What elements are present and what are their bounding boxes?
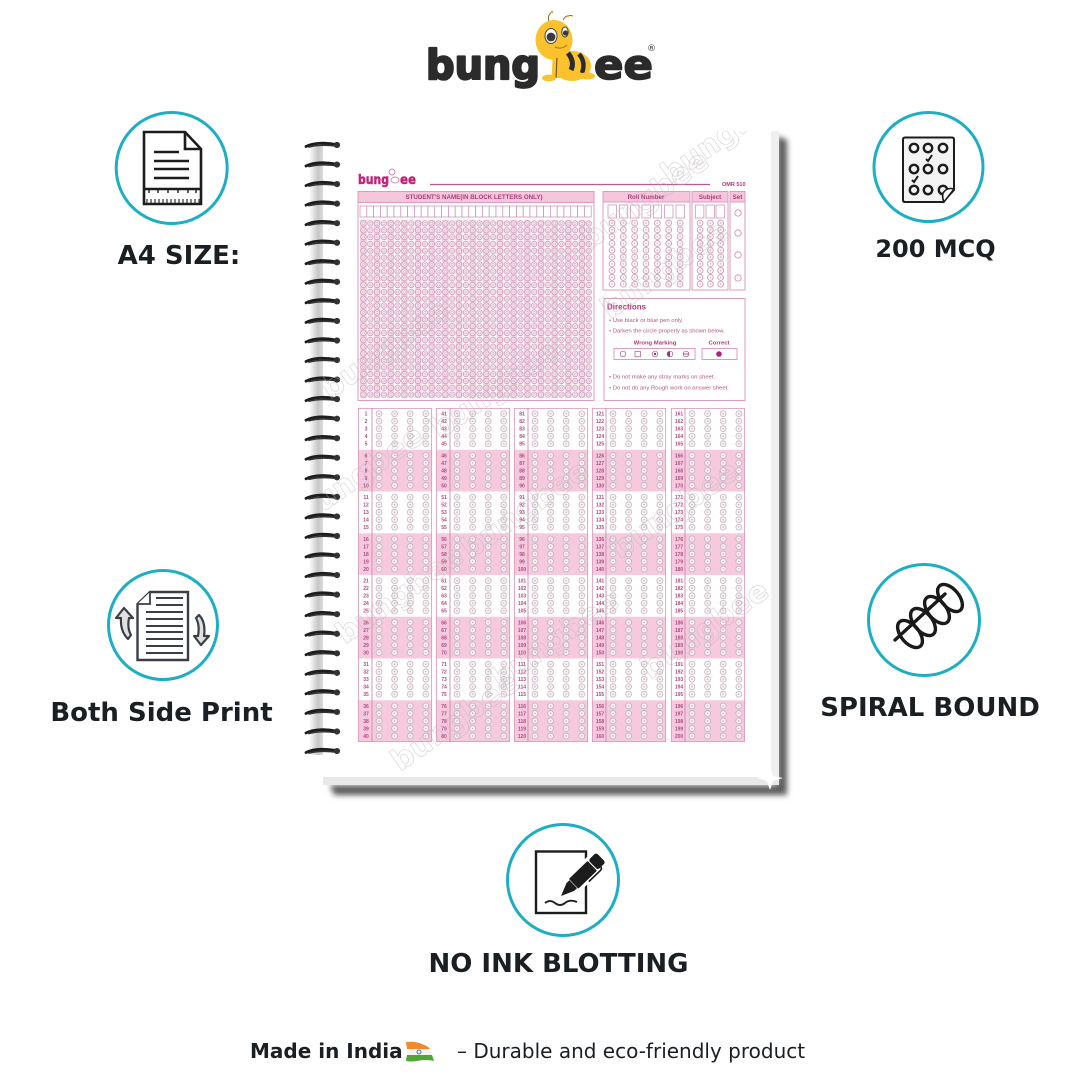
notebook drop shadow xyxy=(330,136,787,795)
answer column 5: 175 xyxy=(675,525,683,531)
answer column 4: 146 xyxy=(596,620,604,626)
answer column 2: 80 xyxy=(441,734,447,740)
binding edge shade xyxy=(309,145,323,755)
answer column 5: 170 xyxy=(675,483,683,489)
answer column 4: 126 xyxy=(596,453,604,459)
logo registered mark: ® xyxy=(647,44,656,54)
panel: directions xyxy=(604,298,745,400)
answer column 5: 184 xyxy=(675,601,683,607)
answer column 3: 120 xyxy=(518,734,526,740)
wrong marking samples xyxy=(614,348,695,360)
answer column 3: 101 xyxy=(518,578,526,584)
answer column 4: 138 xyxy=(596,552,604,558)
answer column 3: 106 xyxy=(518,620,526,626)
brand logo xyxy=(426,11,656,89)
answer column 3: 92 xyxy=(519,502,525,508)
answer column 1: 25 xyxy=(363,608,369,614)
answer column 2: 58 xyxy=(441,552,447,558)
correct sample xyxy=(702,348,737,360)
answer column 4: 133 xyxy=(596,510,604,516)
answer column 5: 165 xyxy=(675,442,683,448)
label: 200 MCQ: 200 MCQ xyxy=(875,235,996,263)
watermarks xyxy=(290,78,796,779)
logo wordmark left: bung xyxy=(426,41,540,89)
answer column 4: 131 xyxy=(596,495,604,501)
answer column 1 xyxy=(358,408,433,742)
answer column 1: 15 xyxy=(363,525,369,531)
durable note: – Durable and eco-friendly product xyxy=(457,1039,805,1063)
answer column 4: 139 xyxy=(596,559,604,565)
answer column 4: 143 xyxy=(596,594,604,600)
answer column 2: 76 xyxy=(441,704,447,710)
answer column 3: 95 xyxy=(519,525,525,531)
watermarks: bungbee xyxy=(385,665,526,779)
logo wordmark right: ee xyxy=(594,41,653,89)
answer column 3: 119 xyxy=(518,726,526,732)
watermarks: bungbee xyxy=(655,78,796,192)
bee mascot xyxy=(536,11,595,81)
answer column 3: 83 xyxy=(519,426,525,432)
answer column 5: 190 xyxy=(675,650,683,656)
answer column 5: 176 xyxy=(675,537,683,543)
answer column 3: 82 xyxy=(519,419,525,425)
answer column 4: 145 xyxy=(596,608,604,614)
answer column 4: 148 xyxy=(596,635,604,641)
directions list bottom: • Do not make any stray marks on sheet. xyxy=(609,374,716,380)
feature: 200 MCQ xyxy=(874,112,996,263)
answer column 1: 35 xyxy=(363,692,369,698)
feature: both side print xyxy=(50,570,273,728)
answer column 1: 21 xyxy=(363,578,369,584)
answer column 3: 114 xyxy=(518,684,526,690)
answer column 5: 171 xyxy=(675,495,683,501)
answer column 3: 81 xyxy=(519,412,525,418)
answer column 3: 109 xyxy=(518,643,526,649)
answer column 4: 142 xyxy=(596,586,604,592)
answer column 2: 51 xyxy=(441,495,447,501)
answer column 1: 16 xyxy=(363,537,369,543)
answer column 1: 29 xyxy=(363,643,369,649)
label: A4 size: A4 SIZE: xyxy=(118,241,240,271)
answer column 5: 188 xyxy=(675,635,683,641)
answer column 3: 97 xyxy=(519,544,525,550)
answer column 2: 47 xyxy=(441,461,447,467)
feature: no ink blotting xyxy=(429,824,688,979)
answer column 2: 52 xyxy=(441,502,447,508)
answer column 4: 124 xyxy=(596,434,604,440)
spiral binding xyxy=(306,142,340,754)
watermarks: bungbee xyxy=(455,453,596,567)
icon: A4 document xyxy=(116,112,227,224)
answer column 3: 88 xyxy=(519,468,525,474)
answer column 1: 14 xyxy=(363,518,369,524)
answer column 5: 187 xyxy=(675,628,683,634)
answer column 1: 39 xyxy=(363,726,369,732)
answer column 2: 65 xyxy=(441,608,447,614)
white page xyxy=(323,131,771,777)
answer column 1: 17 xyxy=(363,544,369,550)
answer column 2: 59 xyxy=(441,559,447,565)
panel: student name xyxy=(358,192,594,400)
answer column 5: 196 xyxy=(675,704,683,710)
answer column 2: 72 xyxy=(441,670,447,676)
answer column 2: 46 xyxy=(441,453,447,459)
answer column 5: 189 xyxy=(675,643,683,649)
watermarks: bungbee xyxy=(575,143,716,257)
answer column 4: 159 xyxy=(596,726,604,732)
icon: MCQ sheet xyxy=(874,112,983,222)
answer column 4: 157 xyxy=(596,711,604,717)
answer column 3: 118 xyxy=(518,719,526,725)
roll boxes xyxy=(608,205,684,218)
answer column 4: 151 xyxy=(596,662,604,668)
answer column 3: 99 xyxy=(519,559,525,565)
watermarks: bungbee xyxy=(595,213,736,327)
answer column 4: 149 xyxy=(596,643,604,649)
answer column 4: 156 xyxy=(596,704,604,710)
answer column 3: 112 xyxy=(518,670,526,676)
watermarks: bungbee xyxy=(635,573,776,687)
answer column 2: 43 xyxy=(441,426,447,432)
answer column 4: 160 xyxy=(596,734,604,740)
answer column 3: 86 xyxy=(519,453,525,459)
panel: subject xyxy=(692,192,728,290)
answer column 3 xyxy=(514,408,589,742)
directions heading: Directions xyxy=(607,302,647,312)
answer column 1: 19 xyxy=(363,559,369,565)
answer column 5: 195 xyxy=(675,692,683,698)
answer column 5: 199 xyxy=(675,726,683,732)
answer column 5: 174 xyxy=(675,518,683,524)
answer column 3: 96 xyxy=(519,537,525,543)
answer column 4: 137 xyxy=(596,544,604,550)
page stack edge xyxy=(323,131,779,785)
subject heading: Subject xyxy=(699,194,721,201)
answer column 2: 48 xyxy=(441,468,447,474)
answer column 1: 4 xyxy=(365,434,368,440)
answer column 1: 28 xyxy=(363,635,369,641)
answer column 5: 180 xyxy=(675,567,683,573)
answer column 2: 68 xyxy=(441,635,447,641)
label: spiral bound: SPIRAL BOUND xyxy=(820,693,1040,723)
answer column 4: 154 xyxy=(596,684,604,690)
panel: set xyxy=(730,192,745,290)
answer column 5: 182 xyxy=(675,586,683,592)
answer column 3: 110 xyxy=(518,650,526,656)
answer column 5: 192 xyxy=(675,670,683,676)
answer column 5: 191 xyxy=(675,662,683,668)
answer column 2: 41 xyxy=(441,412,447,418)
subject bubbles xyxy=(695,220,726,288)
answer column 5: 200 xyxy=(675,734,683,740)
answer column 1: 32 xyxy=(363,670,369,676)
answer column 4: 129 xyxy=(596,476,604,482)
answer column 1: 38 xyxy=(363,719,369,725)
answer column 4: 144 xyxy=(596,601,604,607)
answer column 5: 168 xyxy=(675,468,683,474)
answer column 1: 23 xyxy=(363,594,369,600)
answer column 4: 123 xyxy=(596,426,604,432)
answer column 3: 116 xyxy=(518,704,526,710)
answer column 4: 147 xyxy=(596,628,604,634)
answer column 1: 31 xyxy=(363,662,369,668)
name heading: STUDENT'S NAME(IN BLOCK LETTERS ONLY) xyxy=(405,194,543,201)
answer column 4: 121 xyxy=(596,412,604,418)
answer column 1: 36 xyxy=(363,704,369,710)
answer column 5 xyxy=(671,408,746,742)
answer column 5: 173 xyxy=(675,510,683,516)
answer column 1: 37 xyxy=(363,711,369,717)
answer column 1: 33 xyxy=(363,677,369,683)
answer column 1: 26 xyxy=(363,620,369,626)
answer column 5: 167 xyxy=(675,461,683,467)
answer column 3: 108 xyxy=(518,635,526,641)
answer column 2: 50 xyxy=(441,483,447,489)
answer column 4: 135 xyxy=(596,525,604,531)
answer column 2: 66 xyxy=(441,620,447,626)
answer column 3: 90 xyxy=(519,483,525,489)
watermarks: bungbee xyxy=(425,333,566,447)
answer column 3: 87 xyxy=(519,461,525,467)
answer column 1: 22 xyxy=(363,586,369,592)
answer column 2: 71 xyxy=(441,662,447,668)
answer column 2: 55 xyxy=(441,525,447,531)
answer column 2: 70 xyxy=(441,650,447,656)
answer column 2: 73 xyxy=(441,677,447,683)
answer column 5: 162 xyxy=(675,419,683,425)
answer column 2 xyxy=(436,408,511,742)
answer column 2: 42 xyxy=(441,419,447,425)
answer column 3: 115 xyxy=(518,692,526,698)
answer column 4: 128 xyxy=(596,468,604,474)
label: no ink blotting: NO INK BLOTTING xyxy=(429,949,688,979)
answer column 2: 49 xyxy=(441,476,447,482)
answer column 1: 24 xyxy=(363,601,369,607)
answer column 3: 107 xyxy=(518,628,526,634)
answer column 1: 12 xyxy=(363,502,369,508)
answer column 4: 134 xyxy=(596,518,604,524)
answer column 5: 169 xyxy=(675,476,683,482)
answer column 5: 164 xyxy=(675,434,683,440)
icon: two sided print xyxy=(108,570,218,680)
answer column 3: 91 xyxy=(519,495,525,501)
answer column 5: 185 xyxy=(675,608,683,614)
watermarks: bungbee xyxy=(485,583,626,697)
answer column 2: 78 xyxy=(441,719,447,725)
made in india: Made in India xyxy=(250,1039,403,1063)
icon: indian flag xyxy=(406,1042,434,1062)
answer column 4: 152 xyxy=(596,670,604,676)
answer column 1: 34 xyxy=(363,684,369,690)
answer column 2: 75 xyxy=(441,692,447,698)
answer column 2: 44 xyxy=(441,434,447,440)
answer column 1: 30 xyxy=(363,650,369,656)
answer column 1: 5 xyxy=(365,442,368,448)
answer column 1: 7 xyxy=(365,461,368,467)
answer column 2: 61 xyxy=(441,578,447,584)
answer column 3: 103 xyxy=(518,594,526,600)
watermarks: bungbee xyxy=(315,293,456,407)
answer column 3: 111 xyxy=(518,662,526,668)
answer column 4: 155 xyxy=(596,692,604,698)
icon: page and pen xyxy=(508,824,618,936)
answer column 2: 64 xyxy=(441,601,447,607)
answer column 5: 178 xyxy=(675,552,683,558)
answer column 5: 194 xyxy=(675,684,683,690)
answer column 2: 79 xyxy=(441,726,447,732)
feature: spiral bound xyxy=(820,564,1040,723)
answer column 3: 94 xyxy=(519,518,525,524)
correct label: Correct xyxy=(709,340,730,346)
name letter boxes xyxy=(360,206,591,217)
answer column 1: 3 xyxy=(365,426,368,432)
answer column 1: 10 xyxy=(363,483,369,489)
answer column 1: 8 xyxy=(365,468,368,474)
sheet logo: bung xyxy=(358,173,389,188)
answer column 4: 127 xyxy=(596,461,604,467)
icon: spiral coil xyxy=(868,564,980,676)
answer column 3: 102 xyxy=(518,586,526,592)
wrong marking label: Wrong Marking xyxy=(634,340,677,346)
answer column 5: 197 xyxy=(675,711,683,717)
subject boxes xyxy=(696,205,724,218)
answer column 1: 2 xyxy=(365,419,368,425)
answer column 2: 67 xyxy=(441,628,447,634)
answer column 4 xyxy=(592,408,667,742)
panel: roll number xyxy=(603,192,690,290)
answer column 2: 57 xyxy=(441,544,447,550)
answer column 4: 136 xyxy=(596,537,604,543)
answer column 1: 40 xyxy=(363,734,369,740)
label: both side print: Both Side Print xyxy=(50,698,273,728)
answer column 4: 153 xyxy=(596,677,604,683)
answer column 5: 198 xyxy=(675,719,683,725)
watermarks: bungbee xyxy=(605,453,746,567)
answer column 3: 104 xyxy=(518,601,526,607)
answer column 5: 172 xyxy=(675,502,683,508)
answer column 4: 125 xyxy=(596,442,604,448)
answer column 3: 105 xyxy=(518,608,526,614)
answer column 4: 122 xyxy=(596,419,604,425)
answer column 1: 1 xyxy=(365,412,368,418)
answer column 2: 45 xyxy=(441,442,447,448)
answer column 4: 158 xyxy=(596,719,604,725)
answer column 2: 69 xyxy=(441,643,447,649)
footer note xyxy=(250,1039,805,1063)
answer column 2: 56 xyxy=(441,537,447,543)
answer column 5: 177 xyxy=(675,544,683,550)
answer column 1: 6 xyxy=(365,453,368,459)
answer column 2: 53 xyxy=(441,510,447,516)
answer column 1: 20 xyxy=(363,567,369,573)
right page edge xyxy=(771,131,779,777)
answer column 4: 150 xyxy=(596,650,604,656)
answer column 3: 85 xyxy=(519,442,525,448)
roll bubbles xyxy=(606,220,686,288)
watermarks: bungbee xyxy=(330,538,471,652)
answer column 2: 54 xyxy=(441,518,447,524)
roll heading: Roll Number xyxy=(628,194,665,201)
set heading: Set xyxy=(733,194,742,201)
directions list top: • Use black or blue pen only. xyxy=(609,318,684,324)
answer column 4: 132 xyxy=(596,502,604,508)
sheet logo bee xyxy=(389,169,399,183)
answer column 3: 89 xyxy=(519,476,525,482)
answer column 2: 63 xyxy=(441,594,447,600)
answer column 1: 27 xyxy=(363,628,369,634)
answer column 2: 74 xyxy=(441,684,447,690)
watermarks: bungbee xyxy=(290,418,431,532)
answer column 3: 113 xyxy=(518,677,526,683)
answer column 1: 13 xyxy=(363,510,369,516)
answer column 1: 18 xyxy=(363,552,369,558)
answer column 1: 11 xyxy=(363,495,369,501)
answer column 5: 161 xyxy=(675,412,683,418)
answer column 5: 181 xyxy=(675,578,683,584)
corner glint xyxy=(757,766,783,790)
answer column 5: 163 xyxy=(675,426,683,432)
answer column 3: 93 xyxy=(519,510,525,516)
directions list bottom: • Do not do any Rough work on answer sheet. xyxy=(609,386,729,392)
answer column 4: 130 xyxy=(596,483,604,489)
answer column 1: 9 xyxy=(365,476,368,482)
answer column 2: 62 xyxy=(441,586,447,592)
answer column 3: 98 xyxy=(519,552,525,558)
answer column 5: 193 xyxy=(675,677,683,683)
directions list top: • Darken the circle properly as shown below. xyxy=(609,328,725,334)
sheet logo end: ee xyxy=(400,173,416,188)
set bubbles xyxy=(735,210,741,281)
answer column 3: 100 xyxy=(518,567,526,573)
header rule xyxy=(430,184,710,186)
answer column 2: 77 xyxy=(441,711,447,717)
name bubble grid xyxy=(360,220,592,398)
answer column 5: 179 xyxy=(675,559,683,565)
OMR sheet header xyxy=(358,169,746,188)
answer column 5: 186 xyxy=(675,620,683,626)
answer column 4: 141 xyxy=(596,578,604,584)
answer column 5: 183 xyxy=(675,594,683,600)
answer column 4: 140 xyxy=(596,567,604,573)
form code: OMR 510 xyxy=(722,182,746,188)
answer column 2: 60 xyxy=(441,567,447,573)
feature: A4 size xyxy=(116,112,240,271)
answer column 3: 84 xyxy=(519,434,525,440)
notebook xyxy=(304,131,792,800)
answer column 5: 166 xyxy=(675,453,683,459)
answer column 3: 117 xyxy=(518,711,526,717)
